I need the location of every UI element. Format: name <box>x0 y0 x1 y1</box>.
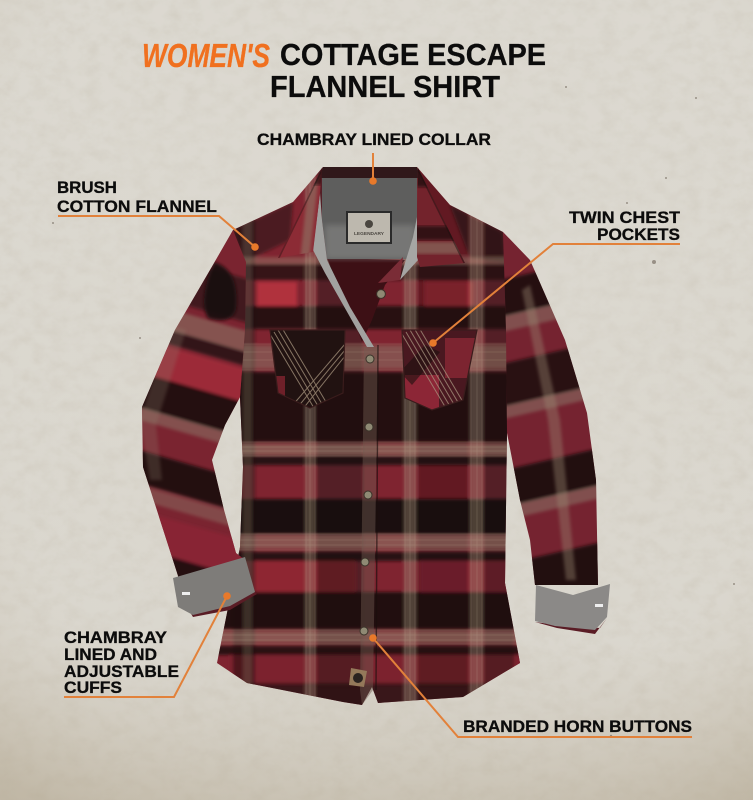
horizontal dark bands <box>200 264 540 280</box>
right front collar point <box>378 257 403 283</box>
shoulder yoke shade <box>233 202 293 262</box>
flannel shirt illustration <box>142 167 610 705</box>
callout: brush cotton flannel <box>57 178 259 251</box>
shirt body with plaid <box>217 167 520 705</box>
callout: chambray lined collar: CHAMBRAY LINED COLLAR <box>257 130 491 149</box>
callout: chambray lined and adjustable cuffs: CHAMBRAY <box>64 628 168 647</box>
callout: twin chest pockets: TWIN CHEST <box>569 208 681 227</box>
vertical tan bands <box>305 160 315 720</box>
title <box>142 37 546 104</box>
placket tag <box>349 668 367 687</box>
inner collar: gray chambray lining <box>322 177 417 259</box>
button placket <box>360 347 378 705</box>
thin weave lines <box>221 176 516 701</box>
callout: chambray lined and adjustable cuffs: ADJUSTABLE <box>64 662 179 681</box>
right gray collar lining <box>400 217 418 280</box>
right collar <box>417 168 465 267</box>
title: FLANNEL SHIRT <box>270 69 500 104</box>
callout: branded horn buttons: BRANDED HORN BUTTONS <box>463 717 692 736</box>
title: WOMEN'S <box>142 37 270 74</box>
left collar <box>278 168 322 258</box>
red highlights <box>257 282 297 306</box>
callout: chambray lined collar <box>257 130 491 185</box>
callout: brush cotton flannel: COTTON FLANNEL <box>57 197 217 216</box>
right cuff: gray chambray <box>535 584 610 634</box>
callout: branded horn buttons <box>369 634 692 737</box>
left cuff: gray chambray <box>173 557 257 617</box>
callout: twin chest pockets <box>429 208 681 347</box>
left sleeve <box>142 230 246 576</box>
callout: chambray lined and adjustable cuffs: LINED AND <box>64 645 157 664</box>
collar band top <box>320 167 420 178</box>
right chest pocket <box>401 329 478 410</box>
left gray placket lining <box>313 193 374 347</box>
left chest pocket <box>269 329 346 408</box>
woven neck label: LEGENDARY <box>354 231 384 236</box>
horn buttons <box>360 290 385 635</box>
horizontal tan bands <box>200 257 540 264</box>
callout: chambray lined and adjustable cuffs <box>64 592 231 697</box>
title: COTTAGE ESCAPE <box>280 37 546 72</box>
vertical shade bands <box>317 160 363 720</box>
inner neck opening <box>327 258 405 342</box>
callout: chambray lined and adjustable cuffs: CUFFS <box>64 678 122 697</box>
callout: twin chest pockets: POCKETS <box>597 225 680 244</box>
right sleeve <box>503 232 598 585</box>
callout: brush cotton flannel: BRUSH <box>57 178 117 197</box>
woven neck label <box>346 211 392 244</box>
